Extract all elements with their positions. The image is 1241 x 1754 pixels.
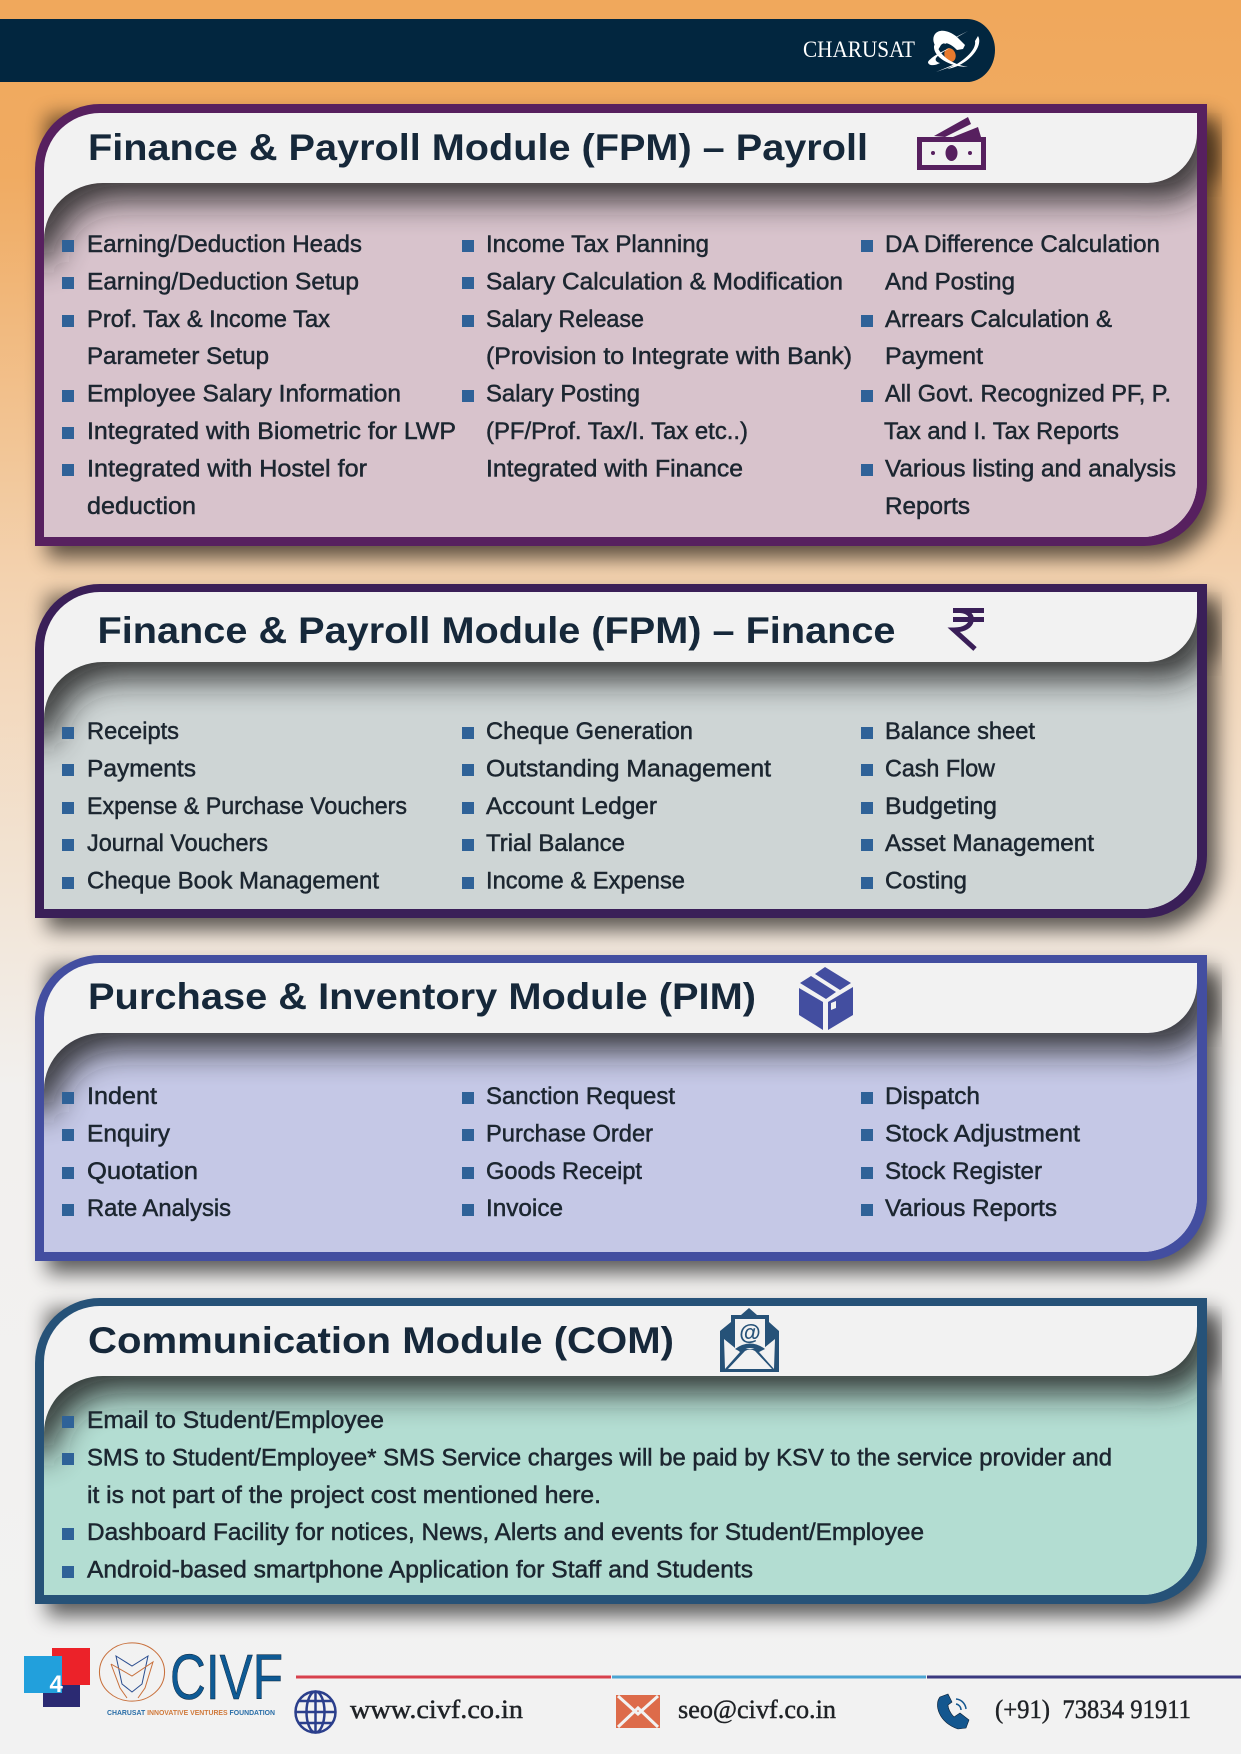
list: communication features: SMS to Student/Employee* SMS Service charges will be paid by KSV to the service provider and xyxy=(87,1444,1112,1471)
list: column 3: Arrears Calculation & xyxy=(885,306,1112,333)
brand name: CHARUSAT xyxy=(803,37,915,62)
list: column 1: Quotation xyxy=(87,1158,198,1185)
list: column 1: Expense & Purchase Vouchers xyxy=(87,793,407,820)
list: column 3: Stock Register xyxy=(885,1158,1042,1185)
list: column 1: Integrated with Hostel for xyxy=(87,455,367,482)
panel: Finance & Payroll Module - Finance xyxy=(20,569,1220,930)
list: column 1: Receipts xyxy=(87,718,179,745)
website: www.civf.co.in xyxy=(350,1695,523,1724)
list: column 3: Dispatch xyxy=(885,1083,980,1110)
list: column 3: Various listing and analysis xyxy=(885,455,1176,482)
divider lines xyxy=(296,1676,1241,1678)
list: column 2: (PF/Prof. Tax/I. Tax etc..) xyxy=(486,418,748,445)
list: column 2: Purchase Order xyxy=(486,1120,653,1147)
list: column 1: Rate Analysis xyxy=(87,1195,231,1222)
list: communication features: Android-based smartphone Application for Staff and Students xyxy=(87,1557,753,1584)
list: column 2: Invoice xyxy=(486,1195,563,1222)
list: column 1: Employee Salary Information xyxy=(87,381,401,408)
icon: mail xyxy=(616,1695,660,1728)
list: column 2: Cheque Generation xyxy=(486,718,693,745)
panel: Finance & Payroll Module - Payroll xyxy=(20,90,1220,558)
list: column 1 xyxy=(62,1083,231,1222)
list: column 3: DA Difference Calculation xyxy=(885,231,1160,258)
list: column 1: Earning/Deduction Heads xyxy=(87,231,362,258)
list: column 1: Earning/Deduction Setup xyxy=(87,268,359,295)
list: column 2 xyxy=(462,718,771,895)
list: column 2 xyxy=(462,231,852,482)
list: column 3: Budgeting xyxy=(885,793,997,820)
list: column 3 xyxy=(861,231,1176,520)
list: column 2: Salary Release xyxy=(486,306,644,333)
list: communication features: Dashboard Facility for notices, News, Alerts and events for Student/Employee xyxy=(87,1519,924,1546)
icon: open envelope xyxy=(720,1308,779,1372)
list: column 2: Income Tax Planning xyxy=(486,231,709,258)
list: column 2 xyxy=(462,1083,675,1222)
panel: Communication Module xyxy=(20,1283,1220,1616)
icon: globe xyxy=(296,1691,336,1733)
heading: Finance & Payroll Module (FPM) – Payroll xyxy=(88,127,868,168)
page number squares: 4 xyxy=(50,1671,64,1698)
top header bar xyxy=(0,19,995,82)
list: column 1: Integrated with Biometric for LWP xyxy=(87,418,456,445)
list: column 1 xyxy=(62,231,456,520)
list: column 2: Goods Receipt xyxy=(486,1158,642,1185)
list: column 1: Payments xyxy=(87,755,196,782)
list: column 3: And Posting xyxy=(885,268,1015,295)
list: column 3: Reports xyxy=(885,493,970,520)
list: column 2: Integrated with Finance xyxy=(486,455,743,482)
list: column 3: Various Reports xyxy=(885,1195,1057,1222)
CIVF logo: CHARUSAT INNOVATIVE VENTURES FOUNDATION xyxy=(107,1708,275,1717)
heading: Purchase & Inventory Module (PIM) xyxy=(88,976,756,1017)
list: column 2: Income & Expense xyxy=(486,868,685,895)
list: column 3: Balance sheet xyxy=(885,718,1035,745)
list: column 1: Journal Vouchers xyxy=(87,830,268,857)
list: column 1: Indent xyxy=(87,1083,157,1110)
list: column 3: Tax and I. Tax Reports xyxy=(884,418,1119,445)
list: column 1 xyxy=(62,718,407,895)
list: column 2: Sanction Request xyxy=(486,1083,675,1110)
list: column 2: Salary Posting xyxy=(486,381,640,408)
panel: Purchase & Inventory Module xyxy=(20,940,1220,1273)
list: column 2: Trial Balance xyxy=(486,830,625,857)
list: column 3 xyxy=(861,1083,1080,1222)
list: column 1: Parameter Setup xyxy=(87,343,269,370)
icon: phone xyxy=(937,1694,969,1729)
list: column 2: Outstanding Management xyxy=(486,755,771,782)
list: column 2: (Provision to Integrate with Bank) xyxy=(486,343,852,370)
phone number: (+91) 73834 91911 xyxy=(995,1695,1191,1724)
CIVF logo xyxy=(99,1641,283,1717)
list: column 3: Cash Flow xyxy=(885,755,996,782)
heading: Finance & Payroll Module (FPM) – Finance xyxy=(98,610,896,651)
icon: banknote xyxy=(920,117,984,168)
icon: rupee xyxy=(953,610,984,649)
icon: CHARUSAT logo xyxy=(928,31,979,72)
footer xyxy=(24,1641,1241,1733)
list: column 3 xyxy=(861,718,1094,895)
list: column 3: Asset Management xyxy=(885,830,1094,857)
list: column 1: deduction xyxy=(87,493,196,520)
list: communication features xyxy=(62,1407,1112,1584)
list: column 1: Prof. Tax & Income Tax xyxy=(87,306,330,333)
list: communication features: Email to Student/Employee xyxy=(87,1407,384,1434)
list: column 1: Cheque Book Management xyxy=(87,868,379,895)
icon: box xyxy=(799,967,853,1030)
list: column 3: All Govt. Recognized PF, P. xyxy=(885,381,1171,408)
list: column 3: Costing xyxy=(885,868,967,895)
list: column 3: Stock Adjustment xyxy=(885,1120,1080,1147)
heading: Communication Module (COM) xyxy=(88,1320,674,1361)
list: column 2: Salary Calculation & Modification xyxy=(486,268,843,295)
page number squares xyxy=(24,1648,90,1707)
CIVF logo: CIVF xyxy=(170,1641,283,1713)
list: communication features: it is not part of the project cost mentioned here. xyxy=(87,1482,601,1509)
list: column 2: Account Ledger xyxy=(486,793,657,820)
email: seo@civf.co.in xyxy=(678,1695,836,1724)
list: column 3: Payment xyxy=(885,343,983,370)
icon: open envelope: @ xyxy=(739,1320,761,1345)
list: column 1: Enquiry xyxy=(87,1120,170,1147)
